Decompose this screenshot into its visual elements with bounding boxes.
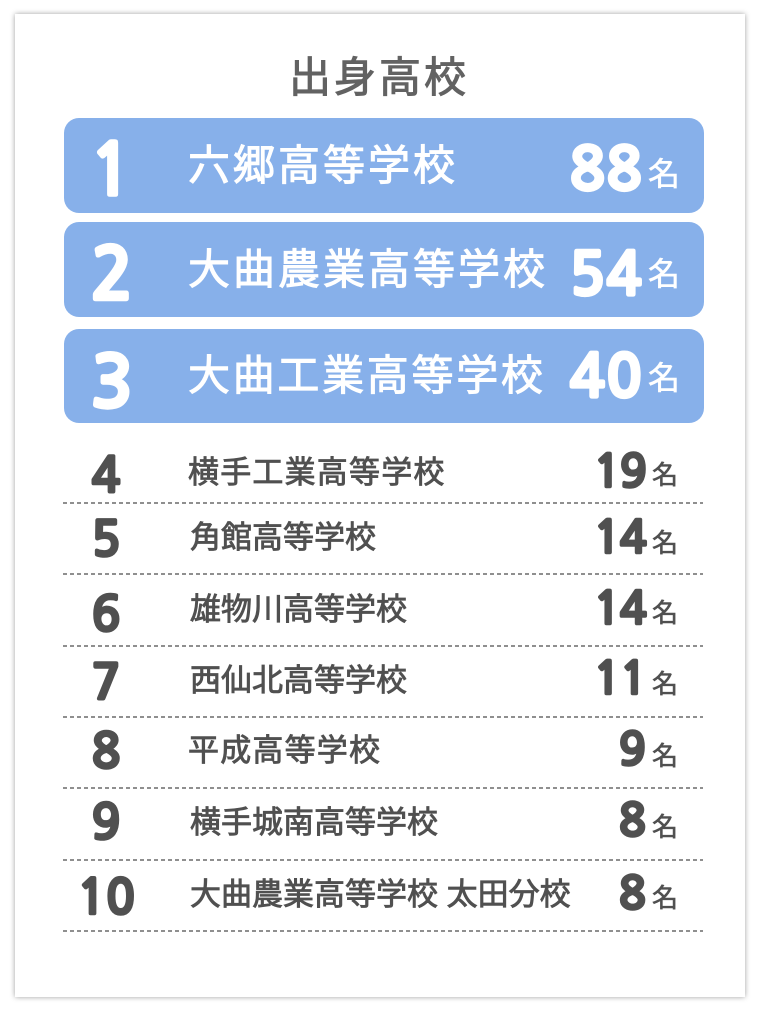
divider [63, 859, 703, 861]
rank 6 row: 雄物川高等学校 [190, 592, 407, 627]
rank 10 row: 大曲農業高等学校 太田分校 [190, 877, 571, 912]
rank 4 row: 4 [91, 453, 121, 500]
rank 2 bar: 54 [569, 245, 643, 304]
divider [63, 716, 703, 718]
rank 2 bar: 名 [648, 256, 680, 292]
divider [63, 502, 703, 504]
rank 9 row [91, 798, 678, 847]
rank 7 row: 11 [593, 656, 646, 701]
rank 1 bar: 1 [89, 135, 133, 206]
rank 4 row: 19 [593, 449, 646, 494]
rank 2 bar: 大曲農業高等学校 [188, 246, 548, 293]
rank 4 row: 横手工業高等学校 [188, 455, 446, 490]
rank 10 row: 8 [619, 871, 645, 916]
rank 8 row: 8 [91, 729, 121, 776]
rank 6 row: 14 [593, 586, 646, 631]
rank 2 bar [64, 222, 704, 317]
rank 3 bar [64, 329, 704, 423]
rank 3 bar: 40 [569, 347, 643, 406]
rank 6 row [91, 586, 678, 639]
rank 8 row [91, 727, 678, 776]
rank 10 row [77, 871, 678, 922]
divider [63, 645, 703, 647]
divider [63, 930, 703, 932]
rank 7 row: 7 [91, 660, 121, 707]
rank 5 row: 5 [91, 517, 121, 564]
title: 出身高校 [289, 54, 469, 101]
rank 8 row: 平成高等学校 [188, 733, 381, 768]
rank 1 bar: 六郷高等学校 [188, 142, 458, 189]
rank 1 bar [64, 118, 704, 213]
rank 8 row: 名 [652, 741, 678, 771]
rank 6 row: 6 [91, 592, 121, 639]
rank 8 row: 9 [619, 727, 645, 772]
rank 2 bar: 2 [90, 239, 134, 310]
rank 5 row: 名 [652, 528, 678, 558]
rank 1 bar: 名 [648, 156, 680, 192]
rank 9 row: 横手城南高等学校 [190, 805, 438, 840]
rank 7 row: 名 [652, 669, 678, 699]
rank 3 bar: 大曲工業高等学校 [188, 352, 546, 399]
rank 9 row: 8 [619, 798, 645, 843]
rank 10 row: 10 [77, 875, 135, 922]
rank 10 row: 名 [652, 883, 678, 913]
rank 5 row: 14 [593, 515, 646, 560]
rank 9 row: 9 [91, 800, 121, 847]
rank 3 bar: 3 [90, 347, 134, 418]
rank 7 row [91, 656, 678, 707]
rank 4 row: 名 [652, 460, 678, 490]
rank 3 bar: 名 [648, 360, 680, 396]
rank 6 row: 名 [652, 598, 678, 628]
rank 1 bar: 88 [569, 140, 643, 199]
rank 5 row: 角館高等学校 [190, 520, 376, 555]
rank 4 row [91, 449, 678, 500]
rank 9 row: 名 [652, 812, 678, 842]
divider [63, 787, 703, 789]
rank 5 row [91, 515, 678, 564]
rank 7 row: 西仙北高等学校 [190, 663, 407, 698]
divider [63, 573, 703, 575]
